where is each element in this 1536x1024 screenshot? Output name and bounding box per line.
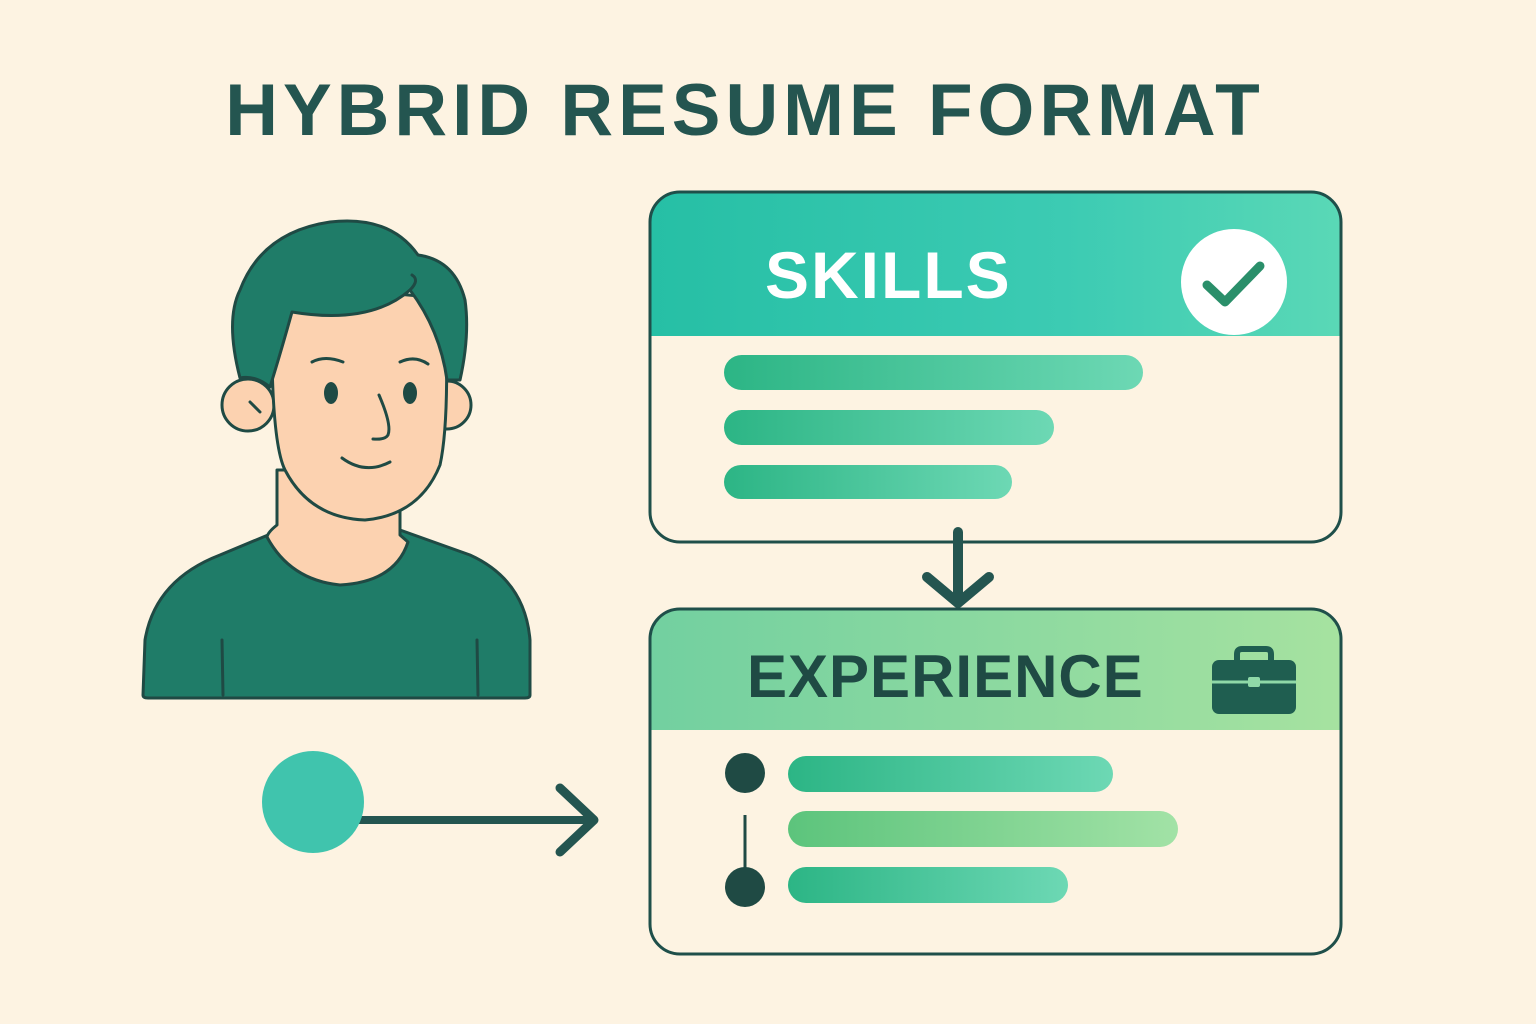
eyes [324, 382, 338, 404]
skills heading: SKILLS [765, 238, 1012, 312]
face [272, 292, 447, 520]
skill bars [724, 355, 1143, 499]
body [143, 530, 530, 698]
arrow down [927, 532, 989, 603]
experience heading: EXPERIENCE [747, 643, 1144, 710]
neck [267, 470, 408, 585]
skills card [650, 192, 1341, 542]
icon: check [1181, 229, 1287, 335]
experience card [650, 609, 1341, 954]
title: HYBRID RESUME FORMAT [225, 70, 1265, 151]
experience bars [788, 756, 1178, 903]
arrow right with circle [262, 751, 594, 853]
person illustration [143, 221, 530, 698]
ears [222, 379, 274, 431]
hair [232, 221, 467, 387]
timeline bullets [725, 753, 765, 907]
icon: briefcase [1212, 649, 1296, 714]
